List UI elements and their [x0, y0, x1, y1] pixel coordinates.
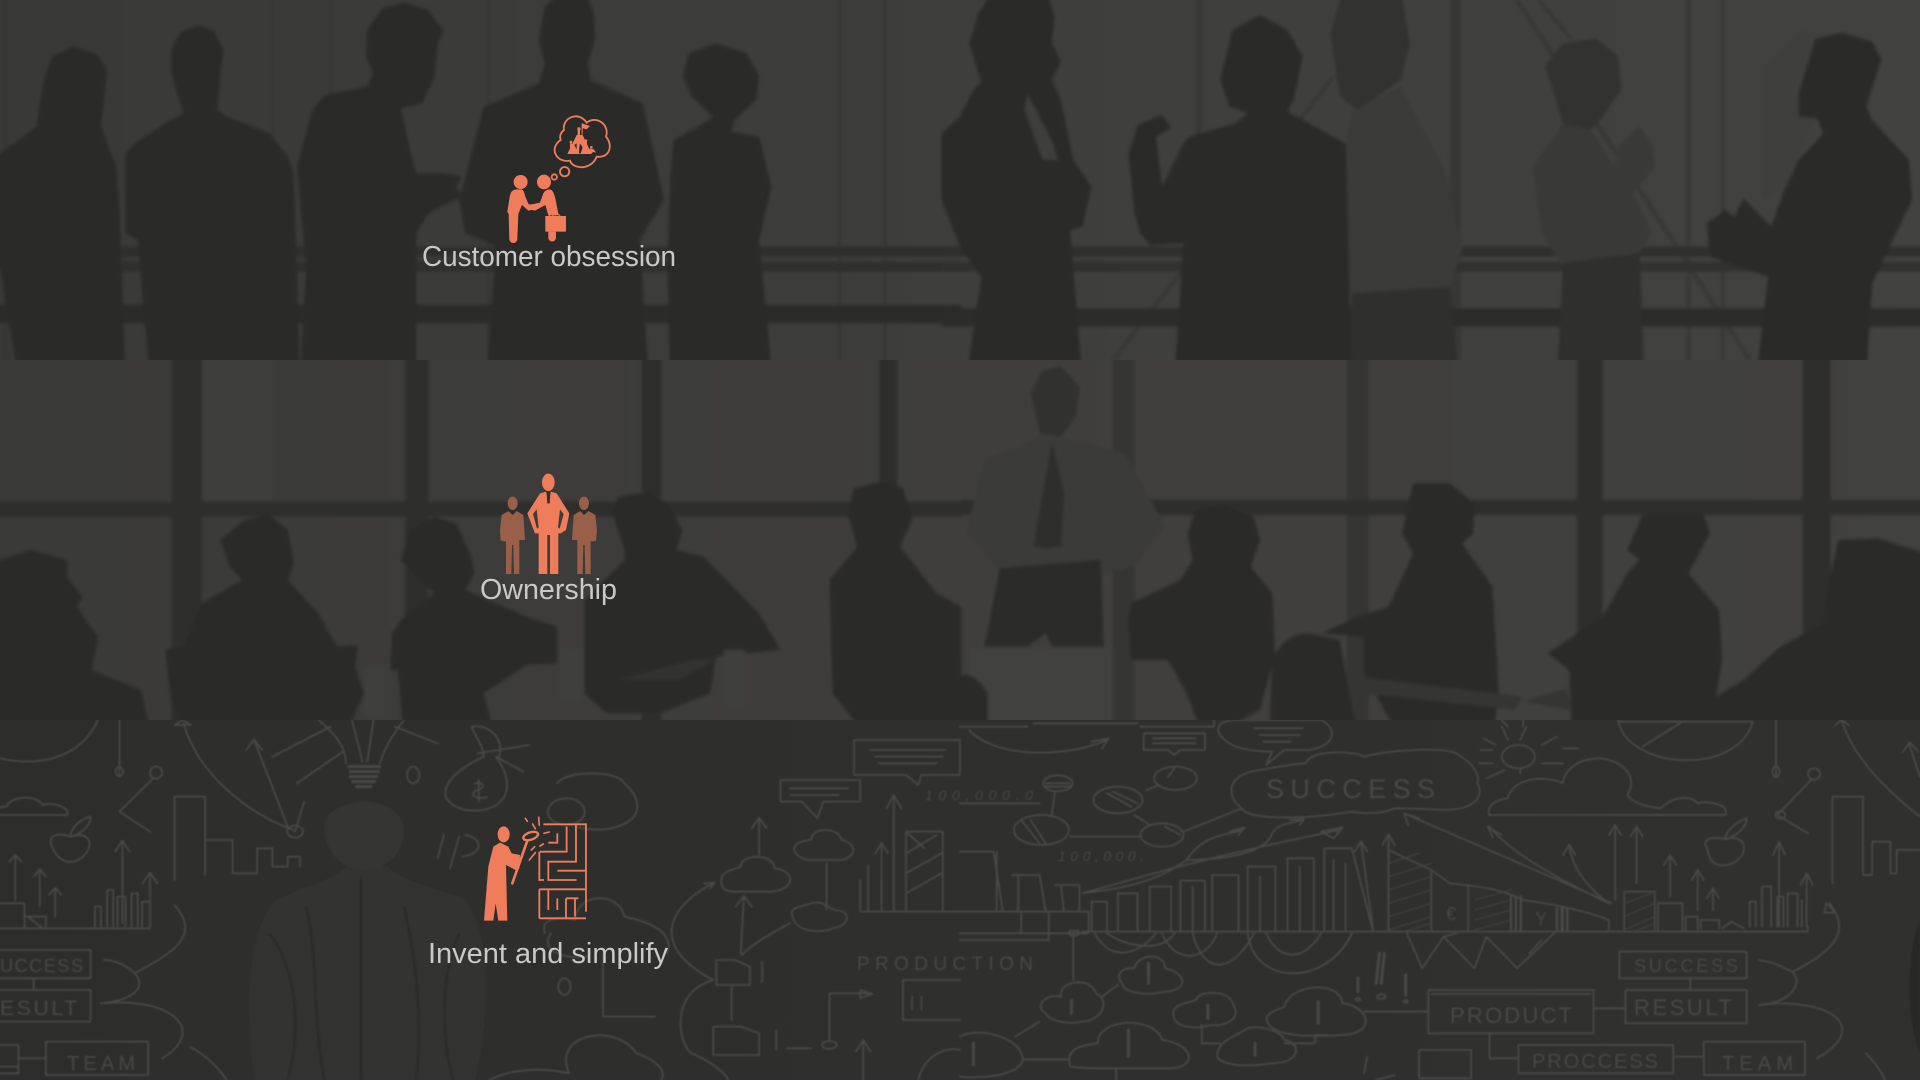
chalk lettering on the board: TEAM	[67, 1053, 135, 1075]
chalk lettering on the board: SUCCESS	[1634, 956, 1738, 976]
icon: leader with two team members	[500, 474, 597, 574]
central leader figure	[527, 474, 569, 574]
chalk lettering on the board: 100,000.0	[925, 787, 1033, 803]
man seen from behind	[249, 802, 486, 1080]
chalk lettering on the board: ESULT	[0, 997, 77, 1020]
chalk lettering on the board: PRODUCT	[1450, 1003, 1572, 1028]
chalk lettering on the board: TEAM	[1722, 1053, 1793, 1075]
chalk lettering on the board: SUCCESS	[1266, 774, 1435, 804]
maze	[539, 824, 586, 918]
left team member	[500, 497, 525, 574]
person figure	[484, 826, 520, 921]
key and sparks	[512, 817, 549, 883]
right team member	[572, 497, 597, 574]
chalk lettering on the board	[0, 774, 1793, 1075]
label: ownership: Ownership	[480, 574, 617, 606]
chalk lettering on the board: UCCESS	[0, 956, 83, 976]
icon: person breaking through maze with a key	[484, 817, 586, 921]
chalk lettering on the board: 100,000.	[1058, 848, 1144, 864]
chalk lettering on the board: PROCCESS	[1532, 1051, 1658, 1073]
chalk lettering on the board: PRODUCTION	[857, 954, 1033, 975]
background photo: man facing chalkboard of business doodles	[0, 700, 1920, 1080]
icon: handshake with thought cloud	[507, 116, 610, 243]
panel: invent and simplify	[0, 700, 1920, 1080]
panel: ownership	[0, 340, 1920, 740]
chalk lettering on the board: €	[1446, 904, 1456, 924]
panel: customer obsession	[0, 0, 1920, 380]
chalk lettering on the board: RESULT	[1634, 995, 1732, 1020]
label: invent and simplify: Invent and simplify	[428, 938, 668, 970]
background photo: meeting room silhouettes	[0, 340, 1920, 740]
chalk lettering on the board: Y	[1535, 909, 1547, 929]
background photo: standing business people silhouettes	[0, 0, 1920, 380]
label: customer obsession: Customer obsession	[422, 241, 676, 273]
